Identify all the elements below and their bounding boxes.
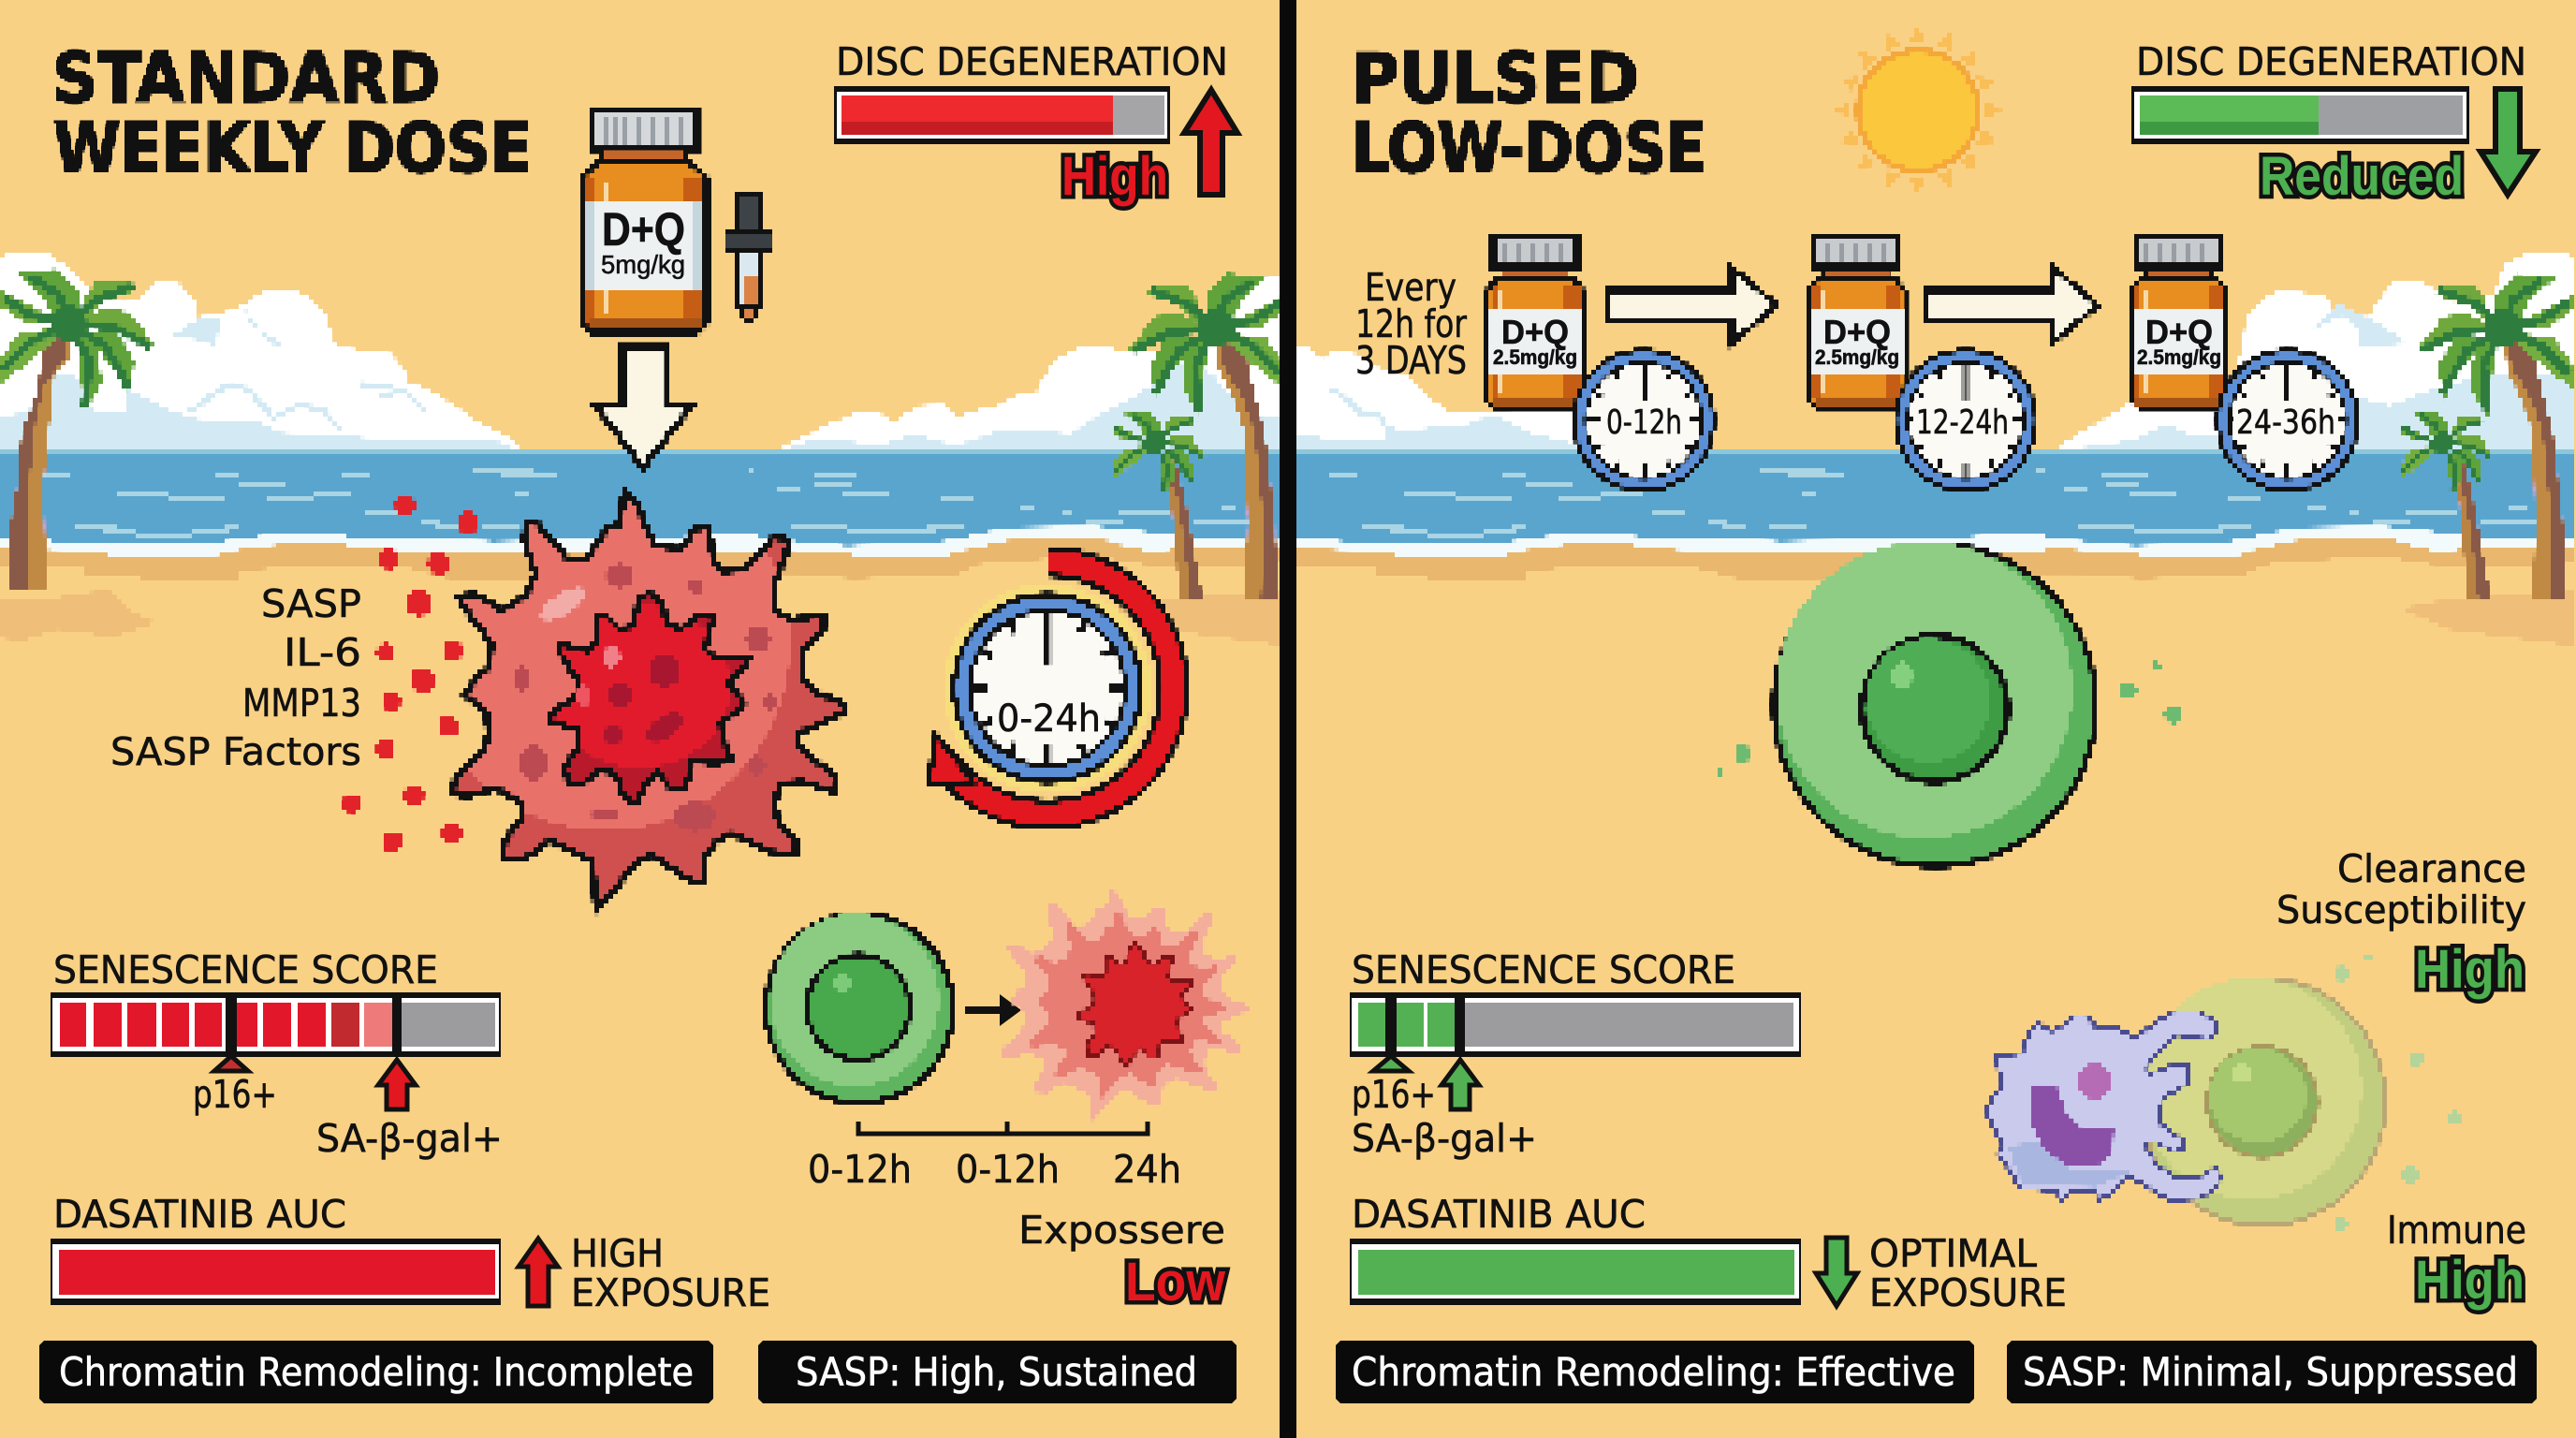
icon: healthy cell turning senescent: [766, 887, 1249, 1122]
icon: clock 0-24h with red sustained arrow: 0-24h: [997, 697, 1101, 741]
clearance susceptibility callout: High: [2415, 939, 2525, 1000]
immune high callout: High: [2415, 1250, 2525, 1311]
dasatinib AUC gauge: high exposure: [51, 1192, 770, 1315]
exposure low callout: Expossere: [1018, 1208, 1225, 1253]
timeline 0-12h to 24h: 24h: [1113, 1147, 1181, 1192]
timeline 0-12h to 24h: [808, 1122, 1181, 1192]
panel: standard weekly dose: [39, 38, 1249, 1403]
dasatinib AUC gauge: high exposure: EXPOSURE: [571, 1270, 770, 1315]
dosing schedule note: Every: [1365, 265, 1456, 310]
senescence score gauge: high: SENESCENCE SCORE: [53, 947, 438, 992]
left panel clouds: [0, 253, 1288, 451]
arrow: dose down to cell: [595, 347, 692, 467]
title: standard weekly dose: STANDARD: [52, 38, 440, 119]
disc degeneration gauge: reduced: DISC DEGENERATION: [2136, 39, 2526, 84]
palm: right large, right panel: [2504, 328, 2566, 599]
senescence score gauge: low: SA-β-gal+: [1352, 1116, 1537, 1161]
clearance susceptibility callout: [2276, 846, 2526, 1000]
immune high callout: [2387, 1208, 2526, 1311]
icon: senescent cell: [449, 487, 847, 917]
clearance susceptibility callout: Clearance: [2337, 846, 2526, 891]
status: chromatin remodeling incomplete: [39, 1341, 713, 1403]
status: SASP high sustained: SASP: High, Sustained: [796, 1349, 1197, 1395]
icon: green sparkles: [1717, 662, 2183, 776]
disc degeneration gauge: high: High: [1061, 146, 1168, 207]
status: chromatin remodeling effective: [1336, 1341, 1974, 1403]
palm: right small, right panel: [2449, 459, 2491, 601]
status: SASP minimal suppressed: [2007, 1341, 2537, 1403]
sea and shore: [0, 451, 1288, 579]
senescence score gauge: high: SA-β-gal+: [316, 1116, 503, 1161]
status: SASP high sustained: [758, 1341, 1237, 1403]
title: pulsed low-dose: [1352, 38, 1706, 189]
senescence score gauge: high: [51, 947, 503, 1161]
center divider: [1280, 0, 1296, 1438]
pulse 2: bottle and clock 12-24h: 12-24h: [1916, 404, 2009, 442]
dasatinib AUC gauge: high exposure: HIGH: [571, 1231, 664, 1276]
pulse 2: bottle and clock 12-24h: D+Q: [1823, 313, 1891, 351]
arrow: pulse 2 to pulse 3: [1927, 268, 2098, 343]
icon: D+Q bottle 5mg/kg: 5mg/kg: [601, 250, 685, 279]
senescence score gauge: low: p16+: [1352, 1072, 1436, 1117]
pulse 3: bottle and clock 24-36h: D+Q: [2145, 313, 2213, 351]
panel: pulsed low-dose: [1336, 27, 2537, 1403]
pulse 1: bottle and clock 0-12h: [1487, 237, 1716, 492]
right panel clouds: [1297, 253, 2576, 451]
dasatinib AUC gauge: optimal exposure: EXPOSURE: [1869, 1270, 2067, 1315]
exposure low callout: [1018, 1208, 1226, 1313]
dasatinib AUC gauge: optimal exposure: DASATINIB AUC: [1352, 1192, 1646, 1237]
arrow: cell transition: [965, 994, 1021, 1026]
disc degeneration gauge: reduced: [2131, 39, 2536, 207]
dosing schedule note: [1355, 265, 1467, 383]
pulse 3: bottle and clock 24-36h: 2.5mg/kg: [2137, 345, 2221, 369]
timeline 0-12h to 24h: 0-12h: [956, 1147, 1060, 1192]
sand shadows at palm bases: [0, 590, 2576, 646]
icon: large healthy cell: [1774, 542, 2096, 866]
clearance susceptibility callout: Susceptibility: [2276, 888, 2526, 932]
title: pulsed low-dose: LOW-DOSE: [1352, 109, 1706, 189]
exposure low callout: Low: [1125, 1252, 1226, 1313]
dasatinib AUC gauge: optimal exposure: [1350, 1192, 2067, 1315]
status: chromatin remodeling incomplete: Chromatin Remodeling: Incomplete: [59, 1349, 694, 1395]
dasatinib AUC gauge: optimal exposure: OPTIMAL: [1869, 1231, 2037, 1276]
SASP factor labels: IL-6: [284, 630, 361, 675]
disc degeneration gauge: reduced: Reduced: [2260, 146, 2464, 207]
icon: macrophage clearing senescent cell: [1986, 955, 2461, 1230]
title: standard weekly dose: WEEKLY DOSE: [53, 109, 532, 189]
disc degeneration gauge: high: [834, 39, 1237, 207]
dosing schedule note: 12h for: [1355, 301, 1467, 346]
beach scenery: clouds, sea, palm trees: [0, 253, 2576, 646]
status: chromatin remodeling effective: Chromatin Remodeling: Effective: [1352, 1349, 1955, 1395]
icon: D+Q bottle 5mg/kg: D+Q: [602, 203, 685, 256]
icon: D+Q bottle 5mg/kg: [581, 110, 707, 332]
timeline 0-12h to 24h: 0-12h: [808, 1147, 912, 1192]
icon: clock 0-24h with red sustained arrow: [929, 562, 1174, 814]
SASP factor labels: MMP13: [242, 681, 361, 726]
SASP factor labels: [110, 581, 361, 774]
SASP factor labels: SASP: [261, 581, 361, 626]
pulse 1: bottle and clock 0-12h: 0-12h: [1606, 404, 1682, 442]
title: standard weekly dose: [52, 38, 532, 189]
dasatinib AUC gauge: high exposure: DASATINIB AUC: [53, 1192, 346, 1237]
pulse 2: bottle and clock 12-24h: 2.5mg/kg: [1815, 345, 1899, 369]
icon: SASP particles: [343, 494, 479, 852]
palm: right small, left panel: [1161, 459, 1203, 601]
pulse 3: bottle and clock 24-36h: 24-36h: [2236, 404, 2335, 442]
SASP factor labels: SASP Factors: [110, 729, 361, 774]
senescence score gauge: low: SENESCENCE SCORE: [1352, 947, 1735, 992]
dosing schedule note: 3 DAYS: [1355, 338, 1467, 383]
arrow: pulse 1 to pulse 2: [1606, 268, 1777, 343]
icon: sun: [1835, 27, 2001, 194]
immune high callout: Immune: [2387, 1208, 2526, 1253]
status: SASP minimal suppressed: SASP: Minimal, Suppressed: [2023, 1349, 2518, 1395]
icon: dropper: [725, 196, 772, 321]
palm: right large, left panel: [1216, 328, 1278, 599]
pulse 2: bottle and clock 12-24h: [1809, 237, 2038, 492]
pulse 3: bottle and clock 24-36h: [2131, 237, 2360, 492]
senescence score gauge: low: [1350, 947, 1801, 1161]
disc degeneration gauge: high: DISC DEGENERATION: [836, 39, 1228, 84]
pulse 1: bottle and clock 0-12h: D+Q: [1501, 313, 1569, 351]
senescence score gauge: high: p16+: [193, 1072, 277, 1117]
title: pulsed low-dose: PULSED: [1352, 38, 1639, 119]
pulse 1: bottle and clock 0-12h: 2.5mg/kg: [1493, 345, 1577, 369]
palm: left: [10, 328, 68, 592]
